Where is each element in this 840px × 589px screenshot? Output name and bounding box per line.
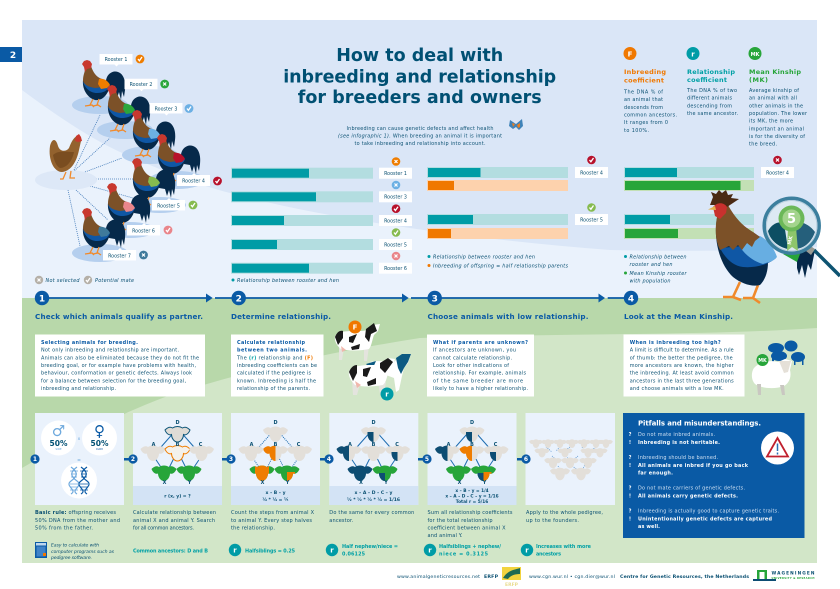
card 4 text: ancestor.: [329, 518, 354, 524]
card 4: other ancestor: ½ * ½ * ½ * ½ = 1/16: [347, 496, 400, 503]
panel: pitfalls: ?: [629, 509, 632, 515]
legs: [723, 282, 760, 303]
rooster 4 bars: [427, 156, 608, 191]
magnifier: 5: [787, 212, 796, 227]
illustration: sheep: MK: [758, 358, 767, 364]
text box: inbreeding too high: and choose animals with a low MK.: [630, 386, 724, 392]
rooster 7: Rooster 7: [108, 253, 131, 259]
step headings: Check which animals qualify as partner.: [35, 312, 203, 321]
chart: relationship and mean kinship bars (step 4): [624, 156, 794, 284]
card 3: counting steps: x – B – y: [265, 490, 286, 496]
cow with r: r: [385, 390, 389, 398]
text box: unknown parents: What if parents are unknown?: [433, 340, 528, 346]
card 2 text: Calculate relationship between: [133, 510, 216, 516]
definition: inbreeding coefficient: to 100%.: [624, 128, 649, 134]
panel: pitfalls: Do not mate inbred animals.: [638, 432, 715, 438]
card 3 text: [229, 510, 315, 556]
footer: ERFP: [484, 574, 499, 580]
card 5: sum: Y: [482, 480, 487, 486]
legend: selection: Potential mate: [95, 278, 134, 284]
intro text: Inbreeding can cause genetic defects and affect health: [346, 126, 494, 132]
step marker 6: [517, 454, 531, 464]
rooster 2: [97, 79, 169, 139]
logo: Wageningen: UNIVERSITY & RESEARCH: [772, 576, 814, 580]
card 4 text: Half nephew/niece =: [342, 544, 398, 550]
card 1 text: [35, 510, 120, 532]
card 2 text: for all common ancestors.: [133, 526, 194, 532]
card 2: search ancestors: r (x, y) = ?: [164, 494, 191, 500]
text box: selecting animals: behaviour, conformation or genetic defects. Always look: [41, 371, 192, 377]
panel: pitfalls: ?: [629, 486, 632, 492]
panel: pitfalls: !: [629, 516, 631, 522]
legend: Relationship between rooster and hen: [433, 254, 535, 260]
rooster 3: Rooster 3: [155, 106, 177, 112]
legend: [428, 254, 568, 270]
logo: Wageningen: [753, 570, 815, 581]
definition: inbreeding coefficient: common ancestors.: [624, 112, 677, 118]
icon: butterfly: [509, 119, 523, 130]
back cow: [370, 354, 411, 392]
text box: calculate relationship: inbreeding coefficients can be: [237, 363, 317, 369]
definition: mean kinship: the breed.: [749, 142, 777, 148]
title: [283, 46, 556, 108]
card 4: other ancestor: [329, 413, 418, 505]
title: How to deal with: [336, 46, 503, 66]
process arrows: [35, 291, 638, 305]
cow with F: F: [353, 324, 358, 332]
definition: relationship coefficient: coefficient: [687, 76, 727, 84]
card 6 text: [521, 510, 603, 558]
card 6 text: Apply to the whole pedigree,: [526, 510, 603, 516]
card 2 text: [133, 510, 216, 554]
footer: Centre for Genetic Resources, the Netherlands: [620, 574, 749, 580]
text box: inbreeding too high: more ancestors are known, the higher: [630, 363, 735, 369]
step marker 1: [30, 454, 40, 464]
panel: pitfalls: ?: [629, 455, 632, 461]
card 3 text: to animal Y. Every step halves: [231, 518, 312, 524]
panel: pitfalls: All animals carry genetic defects.: [638, 493, 738, 499]
panel: pitfalls: Pitfalls and misunderstandings.: [638, 420, 761, 428]
dam: DAM: [96, 447, 103, 451]
card 5: sum: A: [447, 442, 451, 448]
card 5: sum: B: [470, 442, 474, 448]
step marker 1: 1: [33, 456, 37, 463]
sire: ♂: [52, 422, 65, 440]
rooster 6: [104, 183, 172, 238]
rooster 5: [132, 158, 197, 213]
mating lines: [68, 115, 134, 246]
panel: pitfalls: Unintentionally genetic defects are captured: [638, 516, 772, 522]
definition: inbreeding coefficient: Inbreeding: [624, 68, 666, 76]
card 2: search ancestors: [133, 413, 222, 505]
text box: selecting animals: Not only inbreeding and relationship are important.: [41, 348, 179, 354]
calculator note: [50, 542, 115, 561]
legend: [624, 254, 687, 284]
rooster 5 bars: [624, 214, 754, 239]
card 5 text: [424, 510, 513, 558]
calculator note: pedigree software.: [50, 555, 92, 561]
text box: inbreeding too high: A limit is difficult to determine. As a rule: [630, 348, 734, 354]
text box: unknown parents: cannot calculate relationship.: [433, 355, 512, 361]
row rooster 5: Rooster 5: [384, 242, 407, 248]
comb: [710, 190, 739, 207]
sire: SIRE: [55, 447, 62, 451]
step headings: [35, 312, 733, 321]
card 1: basic rule: [35, 413, 124, 505]
face: [713, 203, 727, 219]
definition: inbreeding coefficient: descends from: [624, 105, 663, 111]
card 2: search ancestors: D: [175, 420, 180, 426]
card 3: counting steps: C: [297, 442, 301, 448]
text box: calculate relationship: known. Inbreeding is half the: [237, 378, 316, 384]
panel: pitfalls: Inbreeding should be banned.: [638, 455, 718, 461]
text box: unknown parents: of the same breeder are more: [433, 378, 523, 384]
front cow: [352, 380, 386, 395]
title: for breeders and owners: [298, 88, 542, 108]
rooster selection diagram: [35, 54, 222, 262]
card 3: counting steps: B: [274, 442, 278, 448]
definition: mean kinship: is for the diversity of: [749, 134, 805, 140]
definition: relationship coefficient: Relationship: [687, 68, 735, 76]
sire: 50%: [50, 439, 68, 448]
card 3 text: the relationship.: [231, 526, 275, 532]
text box: unknown parents: [427, 334, 534, 396]
card 5 text: Halfsiblings + nephew/: [439, 544, 501, 550]
dam: [82, 420, 117, 456]
row rooster 4: Rooster 4: [384, 218, 407, 224]
step 3 marker: 3: [432, 294, 438, 304]
legend: with population: [630, 278, 670, 284]
card 1 text: 50% from the father.: [35, 526, 93, 532]
card 4: other ancestor: D: [371, 420, 376, 426]
panel: pitfalls: Do not mate carriers of genetic defects.: [638, 486, 745, 492]
text box: calculate relationship: relationship of the parents.: [237, 386, 310, 392]
step 4 marker: 4: [628, 294, 634, 304]
row rooster 1: Rooster 1: [384, 171, 407, 177]
definition: inbreeding coefficient: It ranges from 0: [624, 120, 668, 126]
text box: selecting animals: Animals can also be eliminated because they do not fit the: [41, 355, 199, 361]
card 4: other ancestor: x – A – D – C – y: [355, 490, 393, 496]
card 2 text: animal X and animal Y. Search: [133, 518, 215, 524]
card 1 text: Basic rule: offspring receives: [35, 510, 116, 516]
definition: mean kinship: other animals in the: [749, 103, 803, 109]
row rooster 6: [231, 252, 412, 274]
text box: inbreeding too high: of thumb: the better the pedigree, the: [630, 355, 733, 361]
definition: mean kinship: [748, 47, 808, 148]
panel: pitfalls: as well.: [638, 524, 660, 530]
beak: [708, 206, 716, 210]
dam: ♀: [94, 422, 105, 440]
legend: Inbreeding of offspring = half relationship parents: [433, 264, 568, 270]
card 4 text: [326, 510, 414, 558]
card 5: sum: x – A – D – C – y = 1/16: [445, 494, 499, 500]
card 2 text: Common ancestors: D and B: [133, 548, 208, 554]
step 1 marker: 1: [39, 294, 45, 304]
rooster 1: Rooster 1: [105, 57, 127, 63]
legend: selection: [35, 276, 134, 284]
text box: selecting animals: Selecting animals for breeding.: [41, 340, 138, 346]
card 3: counting steps: X: [261, 480, 265, 486]
text box: inbreeding too high: [624, 334, 744, 396]
footer: [397, 567, 815, 588]
card 5 text: niece = 0.3125: [439, 552, 489, 558]
card 4 text: 0.06125: [342, 552, 366, 558]
card 3 text: Halfsiblings = 0.25: [245, 548, 296, 554]
card 1: basic rule: x: [78, 437, 81, 442]
step 1 marker: [35, 291, 213, 305]
step 3 marker: [411, 291, 605, 305]
panel: pitfalls: Inbreeding is not heritable.: [638, 440, 720, 446]
card 3 text: Count the steps from animal X: [231, 510, 315, 516]
card 1: basic rule: =: [77, 458, 81, 463]
definition: mean kinship: important an animal: [749, 126, 804, 132]
logo: ERFP: [502, 567, 521, 588]
rooster 5 bars: [427, 203, 608, 239]
step headings: Look at the Mean Kinship.: [624, 312, 733, 321]
rosette tail: [783, 254, 800, 262]
text box: inbreeding too high: the inbreeding. At least avoid common: [630, 371, 734, 377]
calculator note: Easy to calculate with: [51, 542, 99, 548]
illustration: rooster with magnifier: [708, 190, 840, 303]
text box: calculate relationship: The (r) relationship and (F): [236, 355, 313, 361]
step marker 5: 5: [425, 456, 429, 463]
rooster 4 bars: Rooster 4: [766, 170, 789, 176]
step marker 3: [222, 454, 236, 464]
definition: mean kinship: MK: [751, 52, 761, 58]
card 3: counting steps: ½ * ½ = ¼: [262, 496, 289, 503]
rooster 6: Rooster 6: [132, 228, 155, 234]
card 1 text: 50% DNA from the mother and: [35, 518, 120, 524]
step 4 marker: [608, 291, 638, 305]
card 4: other ancestor: B: [372, 442, 376, 448]
text box: inbreeding too high: When is inbreeding too high?: [630, 340, 721, 346]
step marker 2: 2: [131, 456, 135, 463]
card 5: sum: X: [458, 480, 462, 486]
icon: calculator: [35, 542, 47, 558]
card 5: sum: x – B – y = 1/4: [455, 488, 489, 494]
card 4: other ancestor: C: [395, 442, 399, 448]
panel: pitfalls: !: [629, 493, 631, 499]
rooster 4 bars: Rooster 4: [580, 170, 603, 176]
definition: relationship coefficient: [686, 47, 738, 117]
row rooster 5: [231, 228, 412, 250]
definition: inbreeding coefficient: The DNA % of: [623, 90, 663, 96]
card 4: other ancestor: Y: [383, 480, 388, 486]
card 6 text: up to the founders.: [526, 518, 579, 524]
legend: selection: Not selected: [46, 278, 80, 284]
definition: relationship coefficient: The DNA % of two: [686, 88, 737, 94]
card 6: full pedigree: [526, 413, 615, 505]
rooster 4: Rooster 4: [182, 179, 205, 185]
card 2: search ancestors: A: [152, 442, 156, 448]
card 6 text: Increases with more: [536, 544, 592, 550]
step headings: Choose animals with low relationship.: [428, 312, 588, 321]
card 5 text: for the total relationship: [428, 518, 492, 524]
definition: mean kinship: Mean Kinship: [749, 68, 801, 76]
row rooster 6: Rooster 6: [384, 266, 407, 272]
row rooster 4: [231, 204, 412, 226]
step 2 marker: 2: [236, 294, 242, 304]
rooster 4 bars: [624, 156, 794, 191]
intro text: (see infographic 1). When breeding an animal it is important: [338, 134, 502, 140]
panel: pitfalls: !: [629, 463, 631, 469]
flock: [768, 340, 805, 365]
step marker 2: [124, 454, 138, 464]
text box: unknown parents: Look for other indications of: [433, 363, 509, 369]
card 3: counting steps: D: [273, 420, 278, 426]
panel: pitfalls: !: [629, 440, 631, 446]
card 4: other ancestor: X: [359, 480, 363, 486]
panel: pitfalls: Inbreeding is actually good to capture genetic traits.: [638, 509, 779, 515]
step marker 5: [418, 454, 432, 464]
text box: calculate relationship: calculated if the pedigree is: [237, 371, 311, 377]
row rooster 3: Rooster 3: [384, 195, 407, 201]
card 5: sum: [428, 413, 516, 505]
definition: inbreeding coefficient: [623, 47, 677, 134]
illustration: sheep: [752, 340, 805, 395]
step marker 3: 3: [229, 456, 233, 463]
title: inbreeding and relationship: [283, 67, 556, 87]
card 2: search ancestors: Y: [187, 480, 192, 486]
row rooster 1: [231, 157, 412, 179]
footer: www.animalgeneticresources.net: [397, 574, 480, 580]
step headings: Determine relationship.: [231, 312, 331, 321]
card 4 text: r: [330, 546, 334, 554]
footer: www.cgn.wur.nl • cgn.dier@wur.nl: [529, 574, 615, 580]
card 4: other ancestor: A: [348, 442, 352, 448]
definition: relationship coefficient: different animals: [687, 96, 732, 102]
definition: mean kinship: its MK, the more: [749, 119, 793, 125]
row rooster 3: [231, 181, 412, 202]
card 5 text: and animal Y.: [428, 533, 463, 539]
rooster 1: [72, 54, 144, 114]
legend: Relationship between: [630, 254, 686, 260]
calculator note: computer programs such as: [51, 549, 115, 555]
legend: Mean Kinship rooster: [630, 271, 687, 277]
text box: unknown parents: If ancestors are unknown, you: [433, 348, 516, 354]
text box: inbreeding too high: ancestors in the last three generations: [630, 378, 734, 384]
rooster 5 bars: Rooster 5: [580, 218, 603, 224]
text box: selecting animals: for a balance between selection for the breeding goal,: [41, 378, 186, 384]
card 5 text: Sum all relationship coefficients: [428, 510, 513, 516]
dam: 50%: [91, 439, 109, 448]
card 3: counting steps: A: [250, 442, 254, 448]
rooster 2: Rooster 2: [130, 82, 152, 88]
text box: unknown parents: relationship. For example, animals: [433, 371, 526, 377]
card 6 text: ancestors: [536, 552, 561, 558]
text box: calculate relationship: between two animals.: [237, 348, 307, 354]
step 2 marker: [215, 291, 409, 305]
magnifier: MK: [787, 234, 795, 245]
body: [716, 218, 768, 286]
text box: unknown parents: likely to have a higher relationship.: [433, 386, 528, 392]
card 5: sum: C: [494, 442, 498, 448]
chart: relationship and inbreeding bars (step 3): [427, 156, 608, 270]
logo: ERFP: ERFP: [505, 582, 519, 588]
text box: selecting animals: [35, 334, 205, 396]
rooster 7: [72, 208, 148, 262]
definition: relationship coefficient: the same ancestor.: [687, 111, 738, 117]
text box: calculate relationship: Calculate relationship: [237, 340, 305, 346]
card 6 text: r: [525, 546, 529, 554]
step marker 4: [320, 454, 334, 464]
card 5: sum: D: [470, 420, 474, 426]
chart: relationship bars (step 2): [231, 157, 412, 284]
step marker 4: 4: [327, 456, 331, 463]
card 2: search ancestors: X: [163, 480, 167, 486]
card 5 text: coefficient between animal X: [428, 526, 506, 532]
card 3: counting steps: [231, 413, 320, 505]
tail: [797, 240, 815, 278]
intro text: to take inbreeding and relationship into account.: [354, 141, 486, 147]
card 5: sum: Total r = 5/16: [456, 499, 488, 505]
rooster 5: Rooster 5: [157, 204, 180, 210]
legend: rooster and hen: [630, 262, 672, 268]
text box: selecting animals: inbreeding and relationship.: [41, 386, 116, 392]
intro text: [338, 126, 502, 147]
card 3 text: r: [233, 546, 237, 554]
definition: mean kinship: (MK): [749, 76, 768, 84]
card 4 text: Do the same for every common: [329, 510, 414, 516]
rooster 4: [149, 134, 222, 189]
illustration: cows: [335, 320, 411, 400]
text box: calculate relationship: [231, 334, 324, 396]
page number tab: [0, 47, 22, 62]
logo: Wageningen: WAGENINGEN: [772, 570, 815, 576]
panel: pitfalls: ?: [629, 432, 632, 438]
sire: [41, 420, 76, 456]
definition: mean kinship: Average kinship of: [749, 88, 799, 94]
legend: Relationship between rooster and hen: [237, 278, 339, 284]
card 5 text: r: [428, 546, 432, 554]
icon: warning sign: [761, 432, 794, 464]
definition: relationship coefficient: descending from: [687, 103, 732, 109]
definition: mean kinship: an animal with all: [749, 96, 797, 102]
panel: pitfalls: All animals are inbred if you go back: [638, 463, 749, 469]
card 2: search ancestors: B: [176, 442, 180, 448]
white sheep: [752, 359, 792, 388]
icon: DNA helices: [61, 462, 97, 498]
page number tab: 2: [10, 51, 16, 61]
definition: relationship coefficient: r: [691, 50, 695, 58]
step marker 6: 6: [524, 456, 528, 463]
panel: pitfalls: [623, 413, 804, 538]
definition: inbreeding coefficient: F: [628, 50, 633, 58]
card 2: search ancestors: C: [199, 442, 203, 448]
text box: selecting animals: breeding goal, or for example have problems with health,: [41, 363, 196, 369]
card 3: counting steps: Y: [285, 480, 290, 486]
magnifier: [764, 198, 840, 276]
panel: pitfalls: far enough.: [638, 471, 673, 477]
definition: mean kinship: population. The lower: [749, 111, 808, 117]
definition: inbreeding coefficient: coefficient: [624, 77, 664, 85]
definition: inbreeding coefficient: an animal that: [624, 97, 663, 103]
hen: [35, 134, 97, 190]
rooster 3: [122, 103, 193, 164]
